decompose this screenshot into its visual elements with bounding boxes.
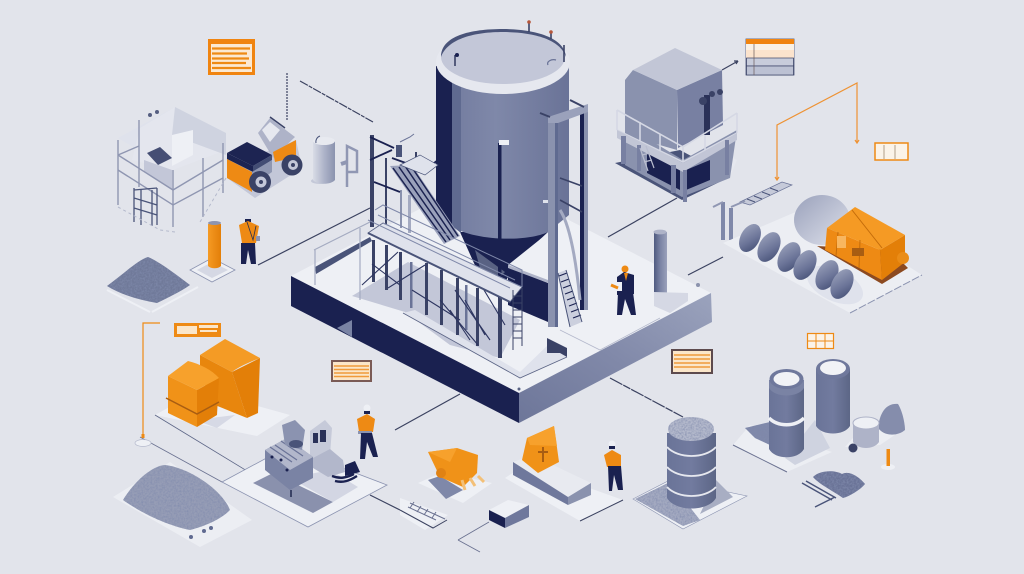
barrel with gravel	[633, 417, 747, 529]
rear body	[273, 140, 296, 162]
railing	[617, 110, 737, 162]
worker: lower left	[357, 404, 378, 459]
post with base	[654, 230, 688, 313]
underside dark panels	[625, 125, 737, 197]
elevated walkway	[314, 205, 522, 358]
small ladder	[134, 188, 157, 226]
orange pin marker	[881, 449, 895, 470]
bed	[227, 142, 272, 166]
cylinder one	[769, 369, 804, 457]
domes	[735, 220, 858, 303]
small plate	[845, 428, 905, 447]
orange hopper on plate	[418, 448, 492, 503]
roof fittings	[455, 22, 564, 66]
worker: left orange vest	[239, 214, 260, 264]
domes plate with orange machine	[723, 195, 922, 313]
control tower	[310, 420, 332, 460]
orange transformers	[155, 339, 290, 477]
dome tank	[878, 404, 905, 435]
wheels	[249, 171, 271, 193]
silo tank	[436, 20, 570, 282]
cylinder two	[816, 359, 850, 434]
building faces	[625, 70, 677, 150]
lower right gravel	[802, 471, 865, 507]
orange L leader	[135, 323, 160, 446]
gravel pile: top left	[107, 257, 198, 312]
thin pole	[498, 140, 509, 358]
platform top	[291, 176, 711, 393]
right tower frame	[540, 100, 588, 327]
main platform	[291, 176, 712, 423]
walkway legs	[372, 240, 502, 358]
gravel pile: lower left	[113, 462, 252, 547]
grid callout	[808, 334, 834, 348]
dust dome	[794, 195, 850, 245]
orange bent leader	[775, 83, 859, 180]
wheeled cart	[227, 117, 302, 198]
slab with orange plate	[505, 426, 623, 521]
small orange table callout	[875, 143, 908, 160]
crusher machine on plate	[222, 420, 387, 527]
small cylinder tank	[311, 136, 335, 184]
table callout	[746, 39, 794, 75]
upper right equipment building	[615, 48, 737, 202]
tank interior	[441, 30, 565, 84]
orange machine	[817, 207, 909, 284]
right strip and pipes	[713, 182, 792, 240]
tiny table diagram	[400, 498, 448, 530]
deck	[368, 223, 522, 302]
machine body	[265, 438, 313, 490]
callout: small orange label	[174, 323, 221, 337]
front box	[166, 361, 219, 427]
callout: center right	[671, 349, 713, 374]
side walkway	[315, 237, 372, 274]
dark housing with white roof	[508, 233, 548, 322]
short cylinder	[853, 424, 879, 448]
rear box	[200, 339, 260, 418]
callout: top left orange document	[208, 39, 255, 75]
left building frame	[118, 107, 226, 232]
conveyor	[390, 165, 460, 244]
left scaffold and conveyor	[370, 134, 460, 244]
orange bollard	[190, 221, 235, 282]
worker: bottom center	[604, 440, 623, 491]
tower stairs	[558, 270, 582, 327]
cab	[258, 118, 295, 158]
platform left wall	[291, 276, 519, 423]
motor	[313, 449, 345, 477]
hopper	[460, 232, 548, 282]
worker: supervisor	[611, 266, 636, 315]
callout: center left	[331, 360, 372, 382]
lower right tanks	[733, 359, 905, 472]
wall notch	[337, 320, 352, 337]
tank plate	[733, 425, 832, 472]
fittings	[704, 95, 710, 135]
tank body	[436, 66, 569, 239]
connector lines	[140, 61, 738, 552]
platform right wall	[519, 293, 712, 423]
recess shade	[352, 262, 520, 358]
tank rim	[436, 30, 570, 94]
ladder	[513, 288, 522, 350]
small dark block	[489, 500, 529, 528]
scaffold posts	[370, 135, 417, 233]
pipe bracket	[341, 146, 357, 187]
